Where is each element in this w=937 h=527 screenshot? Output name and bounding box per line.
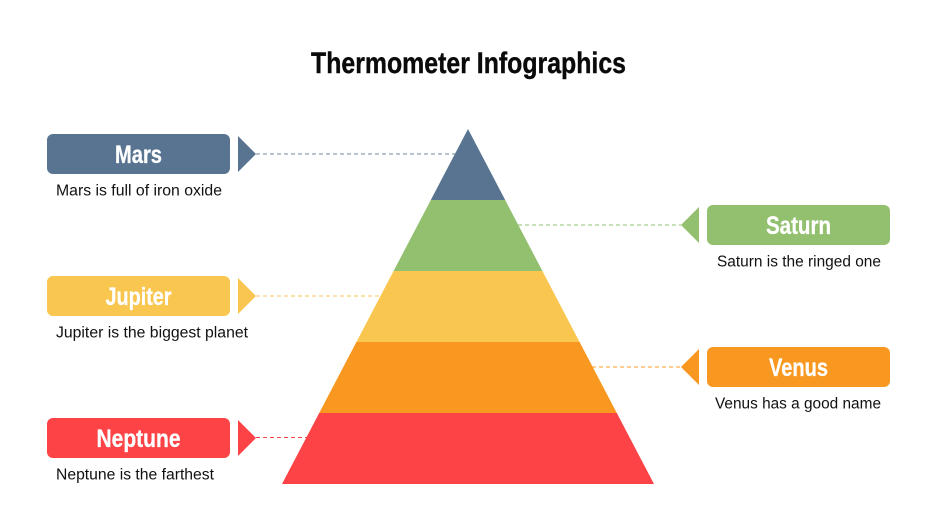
connector: Saturn <box>518 224 681 226</box>
pyramid tier: Jupiter <box>356 271 580 342</box>
pointer: Jupiter <box>238 278 256 314</box>
pyramid tier: Neptune <box>282 413 654 484</box>
label heading: Venus: Venus <box>769 354 828 382</box>
pyramid tier: Saturn <box>394 200 542 271</box>
connector: Neptune <box>256 436 308 438</box>
pointer: Mars <box>238 136 256 172</box>
pyramid tier: Mars <box>431 129 505 200</box>
label box: Venus <box>707 347 890 387</box>
description: Mars: Mars is full of iron oxide <box>56 182 222 200</box>
description: Saturn: Saturn is the ringed one <box>717 254 881 270</box>
callout: Jupiter <box>47 276 384 342</box>
pointer: Saturn <box>681 207 699 243</box>
pointer: Venus <box>681 349 699 385</box>
label box: Jupiter <box>47 276 230 316</box>
connector: Venus <box>592 366 681 368</box>
callout: Venus <box>592 347 890 412</box>
pyramid tier: Venus <box>319 342 617 413</box>
label box: Saturn <box>707 205 890 245</box>
pointer: Neptune <box>238 420 256 456</box>
label box: Mars <box>47 134 230 174</box>
pyramid <box>282 129 654 484</box>
label heading: Saturn: Saturn <box>766 212 831 240</box>
label box: Neptune <box>47 418 230 458</box>
callout: Saturn <box>518 205 890 270</box>
label heading: Jupiter: Jupiter <box>106 283 172 311</box>
callout: Neptune <box>47 418 308 484</box>
callout: Mars <box>47 134 458 200</box>
description: Jupiter: Jupiter is the biggest planet <box>56 324 249 342</box>
description: Venus: Venus has a good name <box>715 396 881 412</box>
description: Neptune: Neptune is the farthest <box>56 466 215 484</box>
label heading: Neptune: Neptune <box>96 425 181 453</box>
connector: Mars <box>256 153 458 155</box>
connector: Jupiter <box>256 295 384 297</box>
label heading: Mars: Mars <box>115 141 162 169</box>
title: Thermometer Infographics <box>311 47 626 80</box>
